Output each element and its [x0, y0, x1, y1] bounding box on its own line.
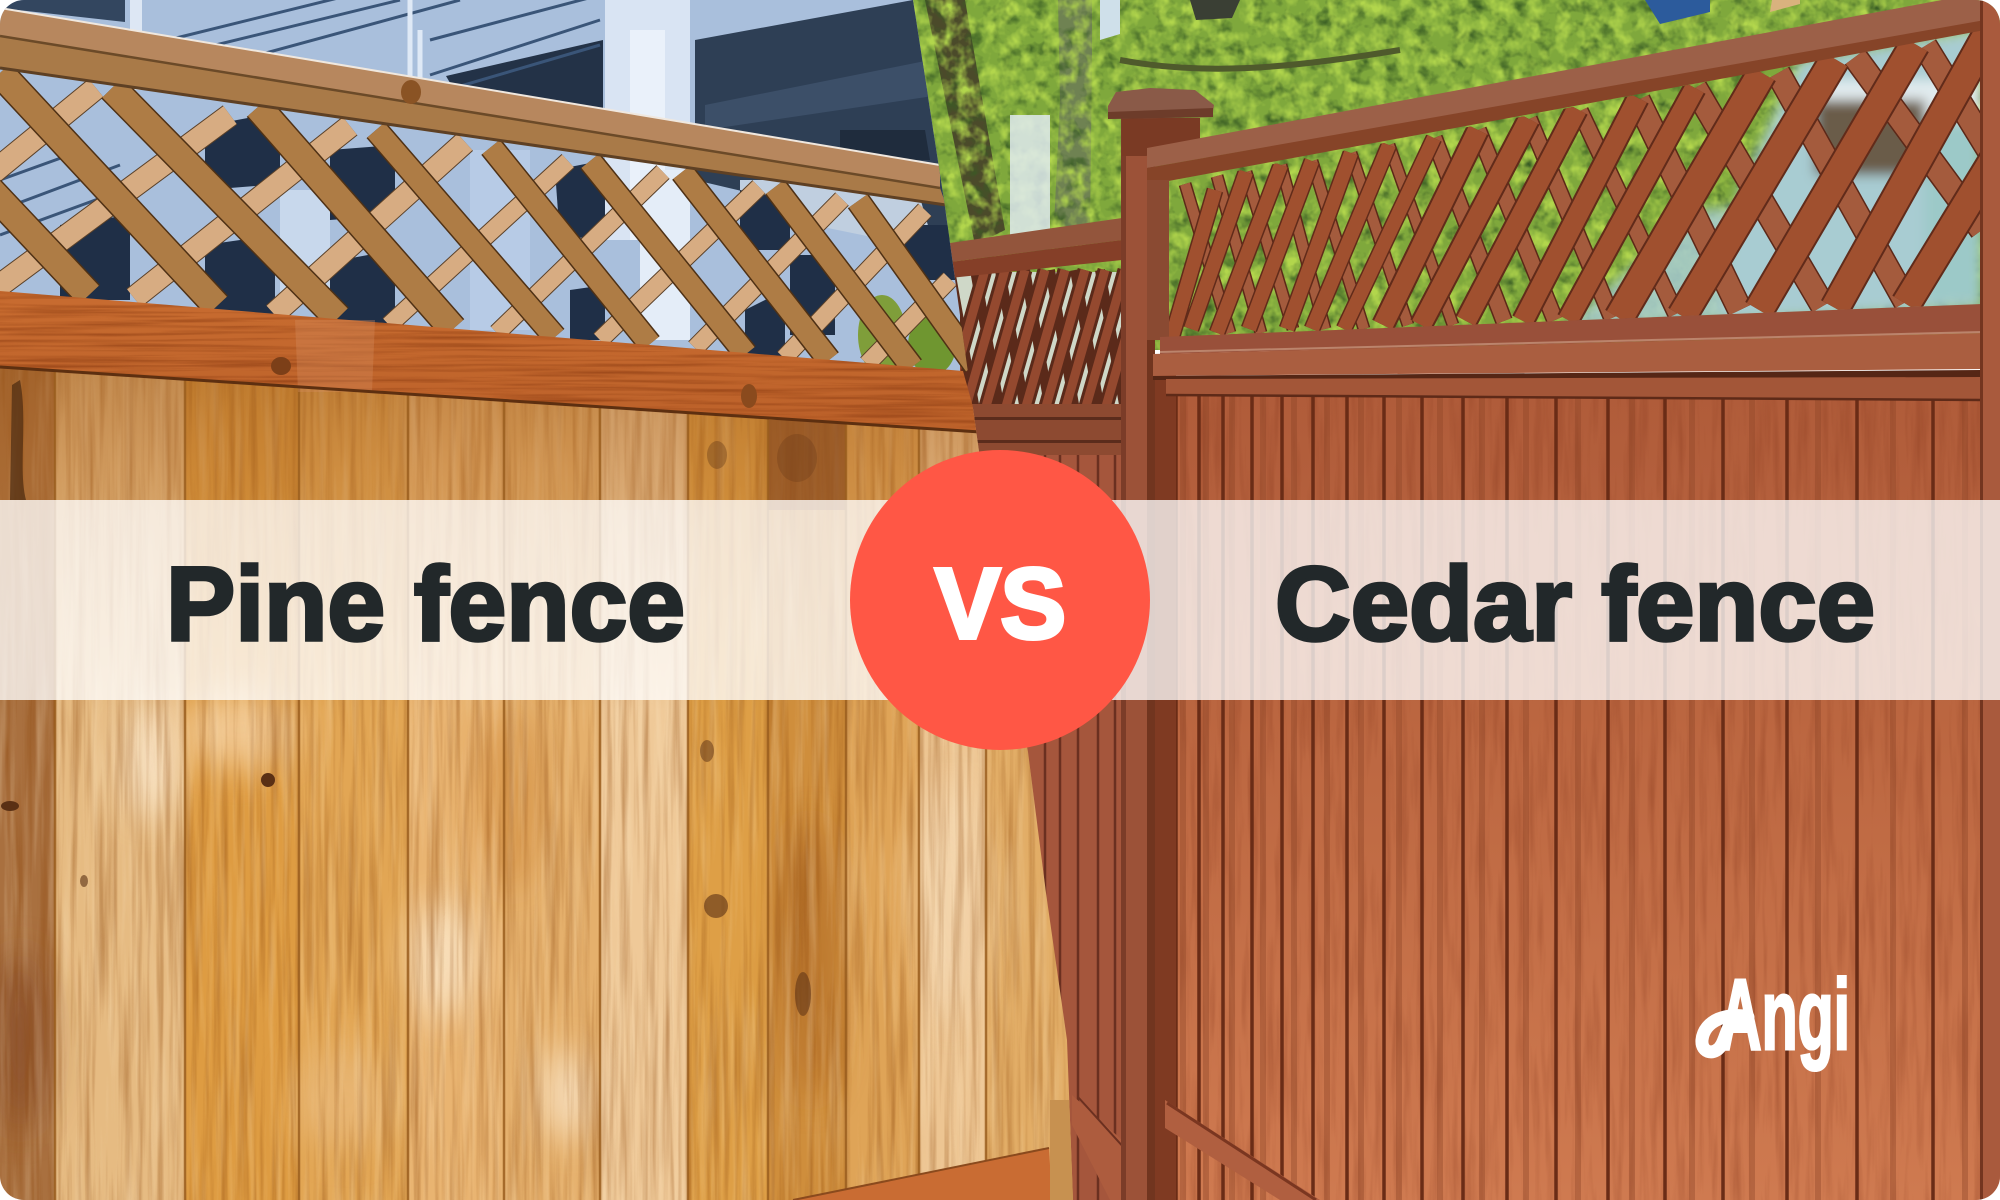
pine lattice [0, 73, 975, 367]
cedar post [1108, 88, 1214, 1200]
vs badge [850, 450, 1150, 750]
windows behind lattice [60, 112, 955, 358]
knots [1, 434, 817, 1016]
heading: cedar fence: Cedar fence [1275, 546, 1875, 663]
pine lower rail [793, 1100, 1075, 1200]
background foliage [900, 0, 2000, 350]
main lattice [1171, 30, 2000, 340]
far fence section [950, 218, 1121, 1200]
pine orange rail [0, 285, 985, 435]
logo: Angi: Angi [1719, 959, 1850, 1071]
house behind fence [0, 0, 960, 380]
icon: logo swoosh [1702, 1016, 1748, 1052]
heading: pine fence: Pine fence [166, 546, 685, 663]
house seen behind lattice [1560, 29, 1982, 330]
cedar horizontal rails [1147, 0, 2000, 1200]
cedar vertical boards [1154, 375, 2000, 1200]
pine top rail [0, 8, 946, 205]
logo: Angi [1702, 959, 1850, 1071]
pine vertical boards [0, 340, 1080, 1200]
panel: cedar fence photo [900, 0, 2000, 1200]
panel: pine fence photo [0, 0, 1080, 1200]
vs badge: VS [935, 548, 1066, 660]
label band [0, 500, 2000, 700]
